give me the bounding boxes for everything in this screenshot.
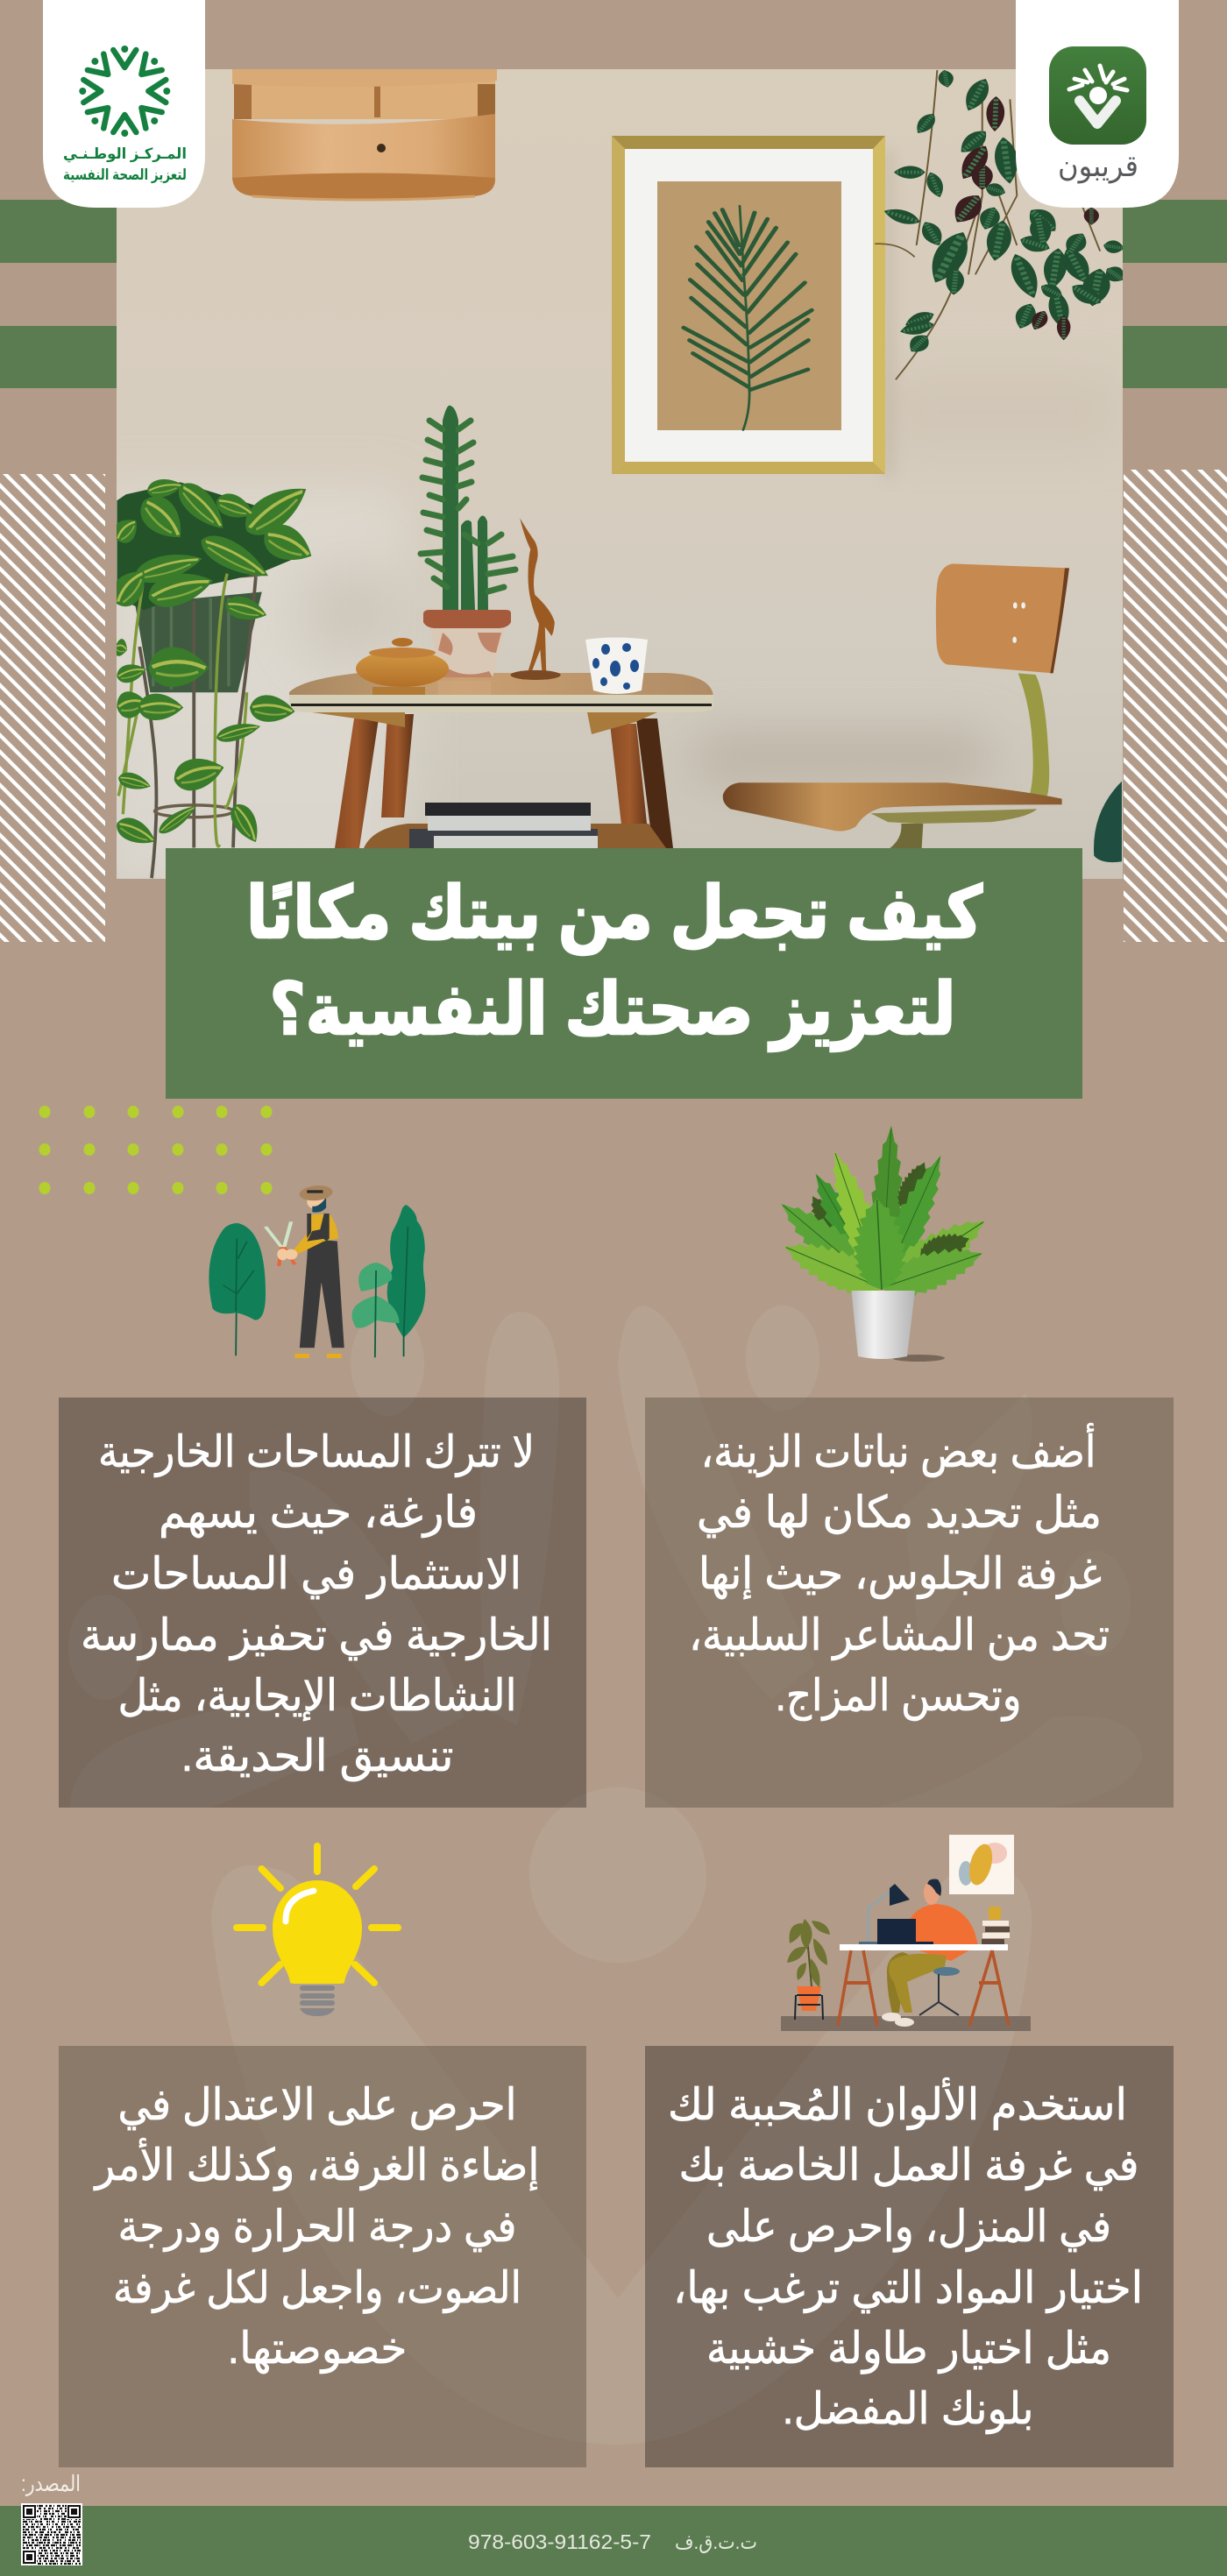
pendant lamp <box>232 69 497 200</box>
footer ISBN number: 978-603-91162-5-7 <box>468 2530 651 2553</box>
books under table <box>409 803 598 848</box>
app name: قريبون <box>1058 150 1138 184</box>
text box: tip 4 lighting: في درجة الحرارة ودرجة <box>117 2202 517 2253</box>
panel: room photo illustration <box>88 69 1129 902</box>
logo wordmark: المـركـز الوطـنـي <box>63 145 187 163</box>
title banner <box>166 848 1082 1099</box>
text box: tip 4 lighting: إضاءة الغرفة، وكذلك الأمر <box>93 2138 540 2191</box>
icon: person working at desk <box>781 1835 1031 2031</box>
title text: لتعزيز صحتك النفسية؟ <box>270 970 955 1051</box>
text box: tip 3 work room colours: بلونك المفضل. <box>782 2384 1034 2434</box>
title text: كيف تجعل من بيتك مكانًا <box>246 874 982 955</box>
text box: tip 3 work room colours: استخدم الألوان المُحببة لك <box>668 2077 1127 2130</box>
text box: tip 3 work room colours: اختيار المواد التي ترغب بها، <box>673 2263 1143 2314</box>
decorative green stripes <box>0 200 1227 388</box>
text box: tip 4 lighting: احرص على الاعتدال في <box>117 2080 517 2130</box>
text box: tip 2 outdoor spaces: الخارجية في تحفيز ممارسة <box>81 1610 552 1660</box>
text box: tip 3 work room colours <box>645 2046 1174 2467</box>
text box: tip 1 ornamental plants: مثل تحديد مكان لها في <box>697 1488 1102 1539</box>
wooden chair <box>723 563 1122 862</box>
logo star emblem <box>79 46 170 137</box>
text box: tip 2 outdoor spaces: الاستثمار في المساحات <box>111 1549 521 1599</box>
source label: المصدر: <box>21 2472 81 2496</box>
pothos plant on stand <box>105 475 319 878</box>
logo wordmark <box>63 145 187 184</box>
polka dot cup <box>585 638 648 694</box>
wooden bowl <box>356 638 449 687</box>
icon: gardener with trees <box>209 1183 425 1358</box>
icon: light bulb <box>237 1846 398 2016</box>
logo wordmark: لتعزيز الصحة النفسية <box>63 166 187 184</box>
side table <box>289 673 713 848</box>
text box: tip 4 lighting: الصوت، واجعل لكل غرفة <box>113 2263 521 2314</box>
hatched panel right <box>1124 470 1227 942</box>
text box: tip 1 ornamental plants: وتحسن المزاج. <box>775 1671 1022 1722</box>
decorative dots <box>39 1106 272 1194</box>
text box: tip 2 outdoor spaces: فارغة، حيث يسهم <box>159 1488 478 1539</box>
wooden bird figurine <box>511 518 561 680</box>
icon: potted fern <box>770 1124 996 1362</box>
text box: tip 2 outdoor spaces: النشاطات الإيجابية، مثل <box>117 1671 517 1721</box>
text box: tip 1 ornamental plants: أضف بعض نباتات الزينة، <box>701 1423 1096 1477</box>
title text <box>246 874 982 1051</box>
footer ISBN label: ت.ت.ق.ف <box>675 2530 757 2553</box>
text box: tip 2 outdoor spaces <box>59 1398 586 1808</box>
QR code <box>21 2503 82 2565</box>
text box: tip 4 lighting: خصوصتها. <box>228 2324 407 2374</box>
text box: tip 4 lighting <box>59 2046 586 2467</box>
cactus in terracotta pot <box>421 406 515 677</box>
text box: tip 2 outdoor spaces: لا تترك المساحات الخارجية <box>98 1427 535 1477</box>
hatched panel left <box>0 474 105 942</box>
app icon <box>1049 46 1146 145</box>
text box: tip 1 ornamental plants <box>645 1398 1174 1808</box>
logo tab right: Qareeboon <box>1016 0 1179 208</box>
framed palm picture <box>612 136 885 474</box>
hanging plant <box>875 69 1129 379</box>
text box: tip 3 work room colours: في المنزل، واحرص على <box>706 2202 1111 2253</box>
footer bar <box>0 2506 1227 2576</box>
logo tab left: National Center for Mental Health Promotion <box>43 0 205 208</box>
text box: tip 1 ornamental plants: تحد من المشاعر السلبية، <box>689 1610 1110 1660</box>
text box: tip 2 outdoor spaces: تنسيق الحديقة. <box>181 1731 454 1781</box>
watermark: large logo shape <box>68 1306 1143 2445</box>
text box: tip 3 work room colours: في غرفة العمل الخاصة بك <box>678 2141 1139 2190</box>
text box: tip 3 work room colours: مثل اختيار طاولة خشبية <box>706 2324 1111 2374</box>
text box: tip 1 ornamental plants: غرفة الجلوس، حيث إنها <box>699 1549 1102 1600</box>
